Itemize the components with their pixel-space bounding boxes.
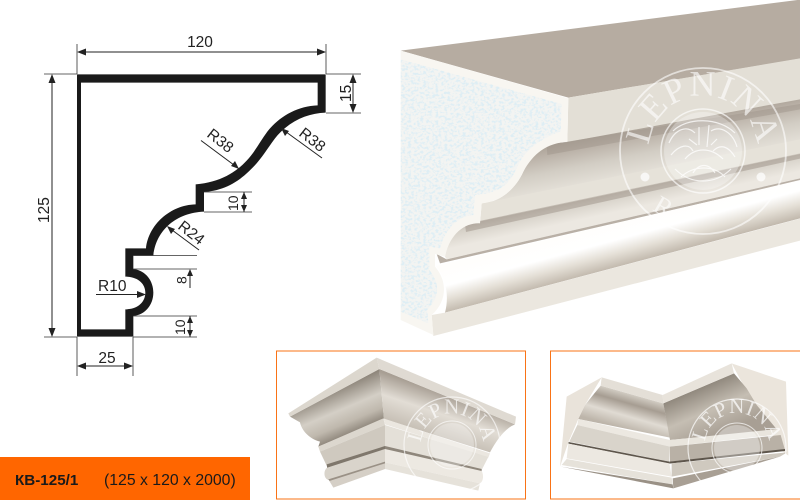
dimension 15: 15 bbox=[338, 85, 355, 102]
radius R38 right bbox=[281, 125, 328, 158]
foam texture bbox=[401, 57, 564, 327]
thin ledge bbox=[437, 178, 800, 263]
extension lines bbox=[44, 44, 361, 376]
light band bbox=[480, 139, 800, 224]
profile outline bbox=[77, 74, 326, 337]
radius R38 left bbox=[201, 126, 239, 169]
watermark bbox=[687, 398, 786, 480]
top surface bbox=[401, 0, 800, 98]
dimension 10 upper bbox=[225, 192, 247, 212]
dimension 125 bbox=[36, 74, 56, 337]
dimension 10 lower bbox=[172, 316, 193, 337]
watermark: R bbox=[649, 190, 679, 224]
product label bar: КВ-125/1 bbox=[15, 472, 79, 489]
shadow lip bbox=[547, 104, 800, 155]
lower cove bbox=[445, 153, 800, 259]
dimension 8 bbox=[174, 269, 193, 288]
radius R38 left: R38 bbox=[204, 126, 236, 157]
dimension 10 lower: 10 bbox=[172, 319, 188, 335]
dimension 25: 25 bbox=[98, 350, 116, 367]
bottom band bbox=[432, 219, 800, 336]
product label bar bbox=[0, 457, 250, 500]
panel: inside corner bbox=[550, 350, 800, 500]
dimension 25 bbox=[77, 350, 133, 370]
fascia bbox=[567, 58, 800, 143]
shadow lip bbox=[465, 154, 800, 232]
panel border bbox=[550, 351, 800, 499]
technical profile drawing bbox=[36, 34, 361, 376]
watermark: LEPNINA bbox=[626, 72, 777, 144]
dimension 8: 8 bbox=[174, 276, 190, 284]
radius R10 bbox=[96, 278, 146, 298]
bead moulding bbox=[436, 180, 800, 313]
watermark bbox=[619, 67, 787, 235]
dimension 15 bbox=[338, 74, 356, 113]
radius R10: R10 bbox=[98, 278, 127, 295]
panel: outside corner bbox=[276, 350, 526, 500]
dimension 120 bbox=[77, 34, 326, 56]
panel border bbox=[276, 351, 526, 499]
foam end cap bbox=[401, 51, 568, 335]
watermark: LEPNINA bbox=[408, 400, 495, 442]
radius R38 right: R38 bbox=[296, 125, 328, 156]
upper cove bbox=[482, 99, 800, 204]
product label bar: (125 x 120 x 2000) bbox=[104, 472, 236, 489]
radius R24: R24 bbox=[175, 218, 208, 249]
watermark bbox=[404, 396, 500, 489]
watermark: LEPNINA bbox=[692, 399, 780, 441]
dimension 125: 125 bbox=[36, 197, 53, 223]
main 3D cornice render bbox=[400, 0, 800, 336]
dimension 120: 120 bbox=[187, 34, 213, 51]
dimension 10 upper: 10 bbox=[225, 195, 241, 211]
